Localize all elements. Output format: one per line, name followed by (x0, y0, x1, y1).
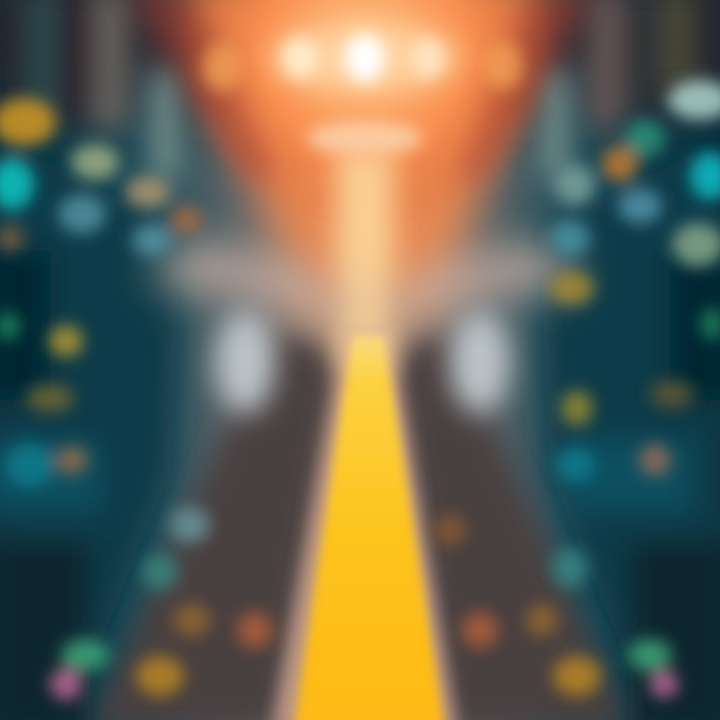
panel: left server racks (0, 0, 180, 720)
panel: right server racks (540, 0, 720, 720)
panel: floor lanes (90, 330, 630, 720)
right coloured rack lights (434, 80, 720, 698)
yellow road (272, 330, 458, 720)
light beam (335, 150, 395, 370)
white side reflections (160, 245, 570, 335)
grey side panels (215, 310, 510, 414)
ceiling lights (202, 26, 523, 155)
top orange glow (125, 0, 595, 310)
left coloured rack lights (0, 98, 273, 700)
